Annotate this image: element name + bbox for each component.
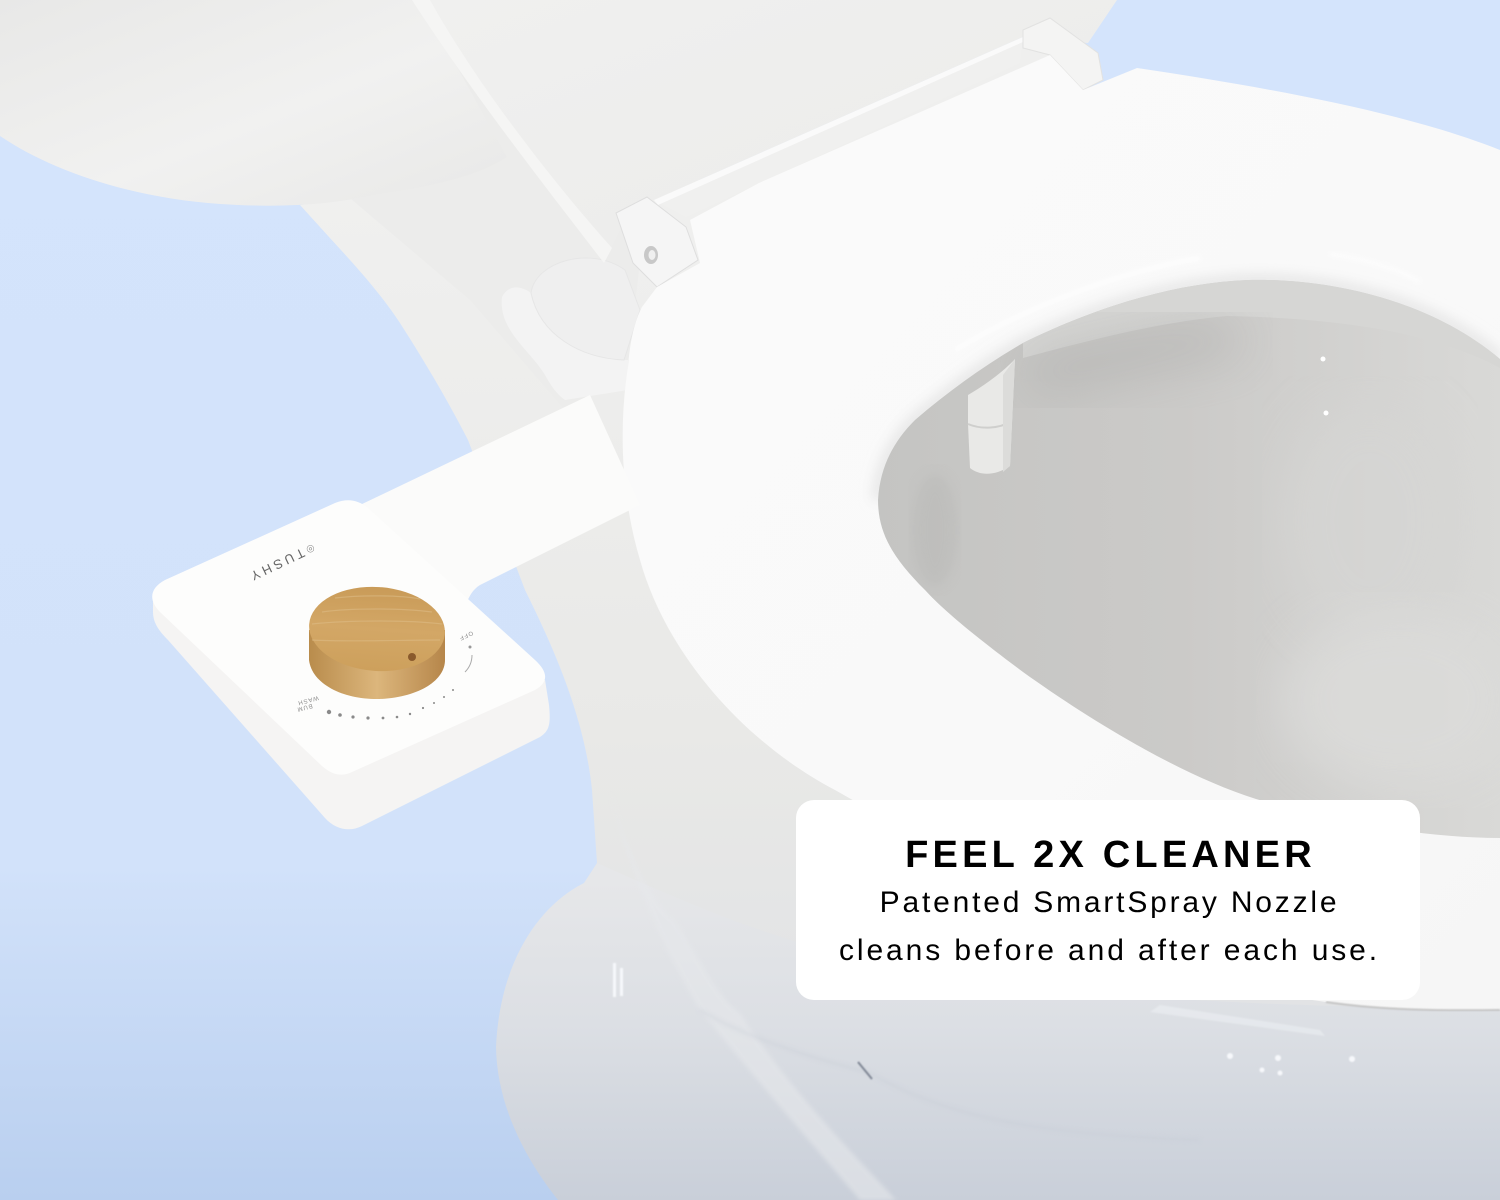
- brand label: ⌾TUSHY: [245, 540, 317, 585]
- seat lower edge line: [1326, 1002, 1500, 1010]
- lid shelf highlight: [654, 37, 1023, 205]
- bowl interior: [860, 270, 1500, 850]
- dial labels: WASH: [296, 694, 319, 706]
- open lid: [412, 0, 1117, 263]
- under rim band: [1023, 280, 1264, 358]
- lid shelf: [654, 37, 1023, 217]
- dial labels: BUM: [296, 702, 313, 712]
- knob side: [309, 630, 445, 699]
- hinge left: [616, 197, 698, 287]
- seat: [623, 55, 1500, 1011]
- seat rim highlight right: [1330, 254, 1420, 282]
- lid rim: [412, 0, 612, 263]
- bidet arm: [360, 395, 640, 603]
- callout heading: FEEL 2X CLEANER: [905, 834, 1316, 876]
- wood grain: [312, 596, 442, 641]
- dial labels: OFF: [458, 629, 474, 641]
- knob top: [306, 582, 448, 676]
- tank: [0, 0, 507, 206]
- toilet base: [496, 863, 1500, 1200]
- knob dot: [408, 653, 416, 661]
- box side: [153, 595, 550, 829]
- hinge right: [1023, 18, 1103, 90]
- open lid backing: [654, 30, 1083, 263]
- left shadow: [913, 475, 957, 585]
- callout: [796, 800, 1420, 1000]
- base seam: [700, 1010, 1200, 1140]
- dial ticks: [327, 689, 454, 720]
- dial labels: [296, 629, 474, 712]
- seat rim highlight: [955, 258, 1200, 350]
- callout line two: cleans before and after each use.: [839, 934, 1380, 967]
- light reflection: [1280, 400, 1460, 640]
- base glints: [613, 963, 1355, 1076]
- mounting disc: [502, 258, 640, 400]
- callout line one: Patented SmartSpray Nozzle: [880, 886, 1339, 919]
- seat shade near bowl: [878, 280, 1500, 500]
- bidet nozzle: [968, 359, 1015, 474]
- lower bowl light: [1305, 655, 1350, 742]
- glints: [1320, 356, 1326, 362]
- bidet control box: [152, 500, 550, 829]
- base seam tick: [858, 1062, 872, 1079]
- shadow under lip: [1044, 318, 1220, 383]
- base band: [610, 790, 896, 1200]
- box top: [152, 500, 545, 775]
- tank hinge ledge: [350, 0, 640, 410]
- toilet body: [300, 180, 1500, 1100]
